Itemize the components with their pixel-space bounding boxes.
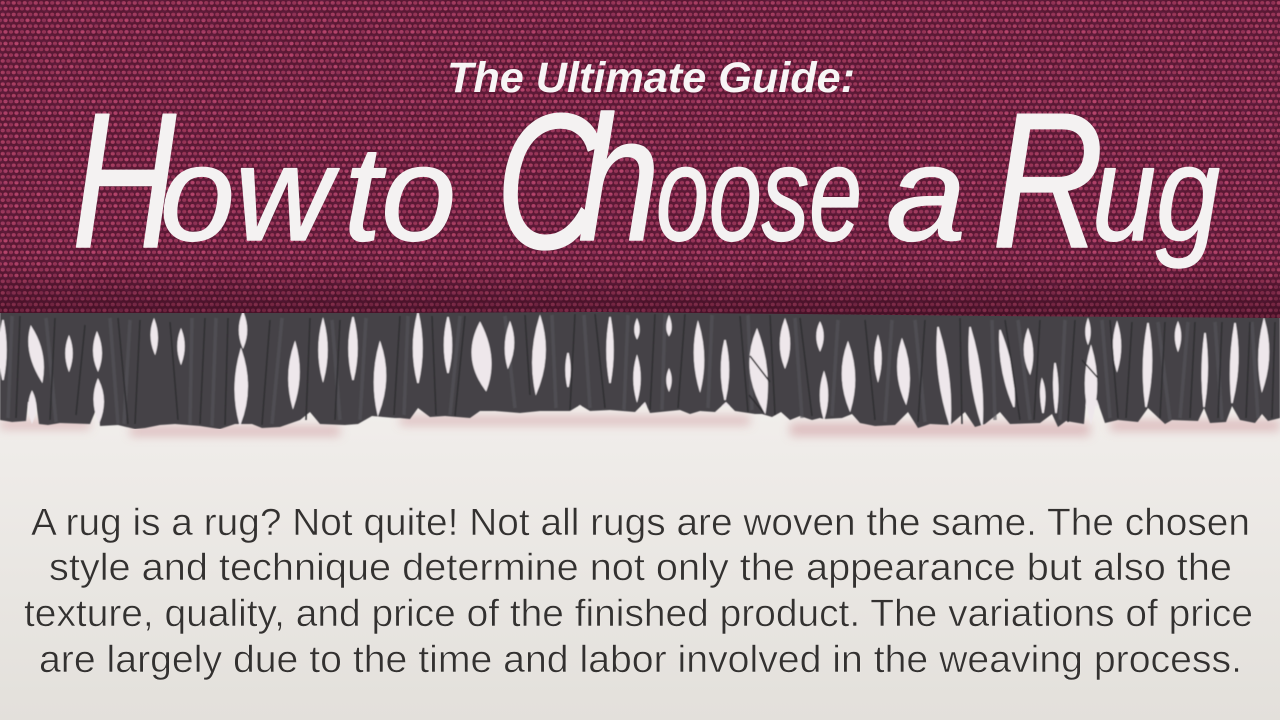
fringe threads body [0, 306, 1280, 429]
word: How [72, 72, 339, 288]
word: Rug: ug [1092, 118, 1220, 269]
word: Rug: R [992, 72, 1104, 288]
intro paragraph [24, 502, 1253, 681]
darkened hem [0, 262, 1280, 318]
word: a: a [886, 118, 966, 269]
fabric slub noise [0, 0, 1280, 312]
intro paragraph: are largely due to the time and labor involved in the weaving process. [39, 639, 1242, 681]
word: Choose: C [496, 73, 601, 289]
word: to: to [344, 118, 456, 269]
fringe backing behind the threads [0, 306, 1280, 406]
rug fringe [0, 306, 1280, 429]
fringe shadow on floor [0, 416, 1280, 436]
word: Rug [992, 72, 1220, 288]
word: How: H [72, 72, 176, 288]
darker strand shadows [16, 314, 1275, 425]
word: Choose: oose [656, 118, 862, 269]
title [72, 72, 1220, 289]
intro paragraph: texture, quality, and price of the finished product. The variations of price [24, 593, 1253, 635]
gaps between fringe threads [0, 313, 1269, 425]
intro paragraph: A rug is a rug? Not quite! Not all rugs are woven the same. The chosen [31, 502, 1250, 544]
word: How: ow [160, 118, 339, 269]
word: Choose [496, 73, 862, 289]
fabric weave texture [0, 0, 1280, 318]
word: Choose: h [578, 79, 660, 278]
intro paragraph: style and technique determine not only the appearance but also the [49, 547, 1232, 589]
woven rug fabric [0, 0, 1280, 318]
subtitle: The Ultimate Guide: [447, 54, 855, 102]
floor background [0, 300, 1280, 720]
lighter thread highlights [8, 314, 1258, 426]
